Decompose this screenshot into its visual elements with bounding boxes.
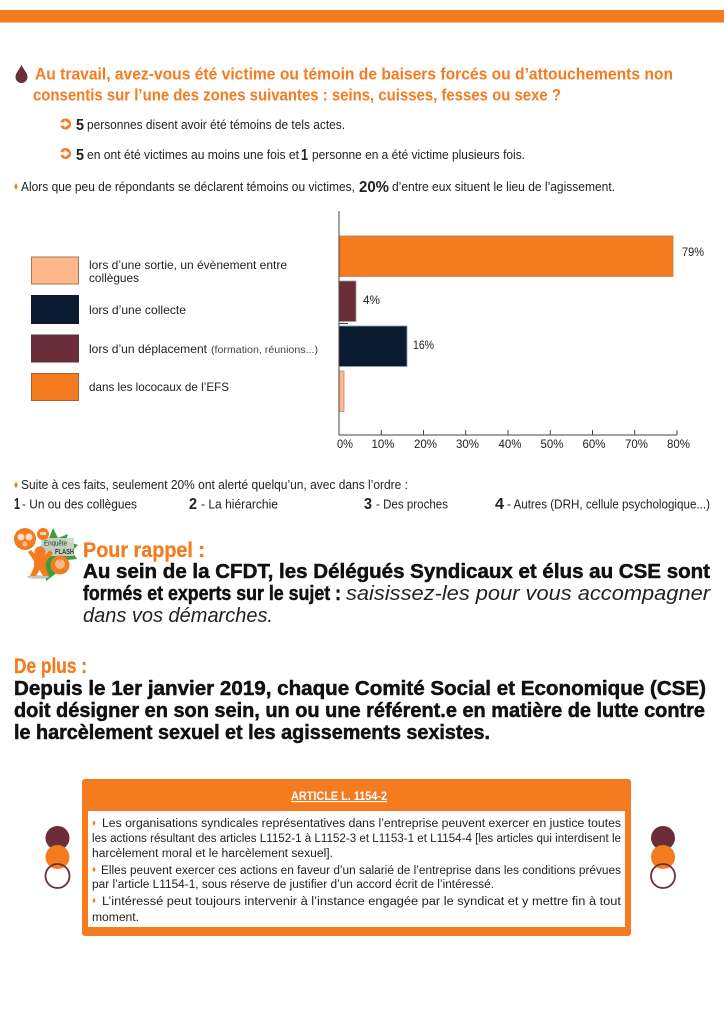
article text: Les organisations syndicales représentatives dans l’entreprise peuvent exercer en justice toutes (102, 818, 621, 830)
bar: collecte 16% (339, 326, 434, 366)
bar: deplacement 4% (339, 281, 380, 322)
bar chart (337, 211, 704, 451)
axis labels: 0% (337, 437, 353, 451)
bar: collecte 16%: 16% (413, 338, 434, 352)
reminder text: Au sein de la CFDT, les Délégués Syndicaux et élus au CSE sont (83, 561, 710, 583)
legend: locaux: dans les lococaux de l’EFS (89, 380, 229, 394)
legend: collecte: lors d’une collecte (89, 303, 186, 317)
rank 3: - Des proches (376, 498, 448, 512)
further block (14, 655, 706, 744)
legend: deplacement: (formation, réunions...) (211, 344, 318, 356)
rank 4: - Autres (DRH, cellule psychologique...) (507, 498, 710, 512)
question text: Au travail, avez-vous été victime ou témoin de baisers forcés ou d’attouchements non (35, 64, 673, 84)
decorative circles right (651, 826, 675, 888)
reminder block (83, 539, 711, 627)
statement: witnesses: 5 (76, 117, 84, 134)
axis labels: 60% (582, 437, 606, 451)
statement: victims: 1 (301, 147, 308, 164)
legend: deplacement (32, 335, 318, 362)
bar: deplacement 4%: 4% (363, 293, 380, 307)
legend: collecte (32, 296, 186, 324)
decorative circles left (46, 826, 70, 888)
rank 2: 2 (189, 496, 197, 513)
bar: sortie (339, 371, 344, 412)
icon: arrow (59, 118, 71, 130)
statement: victims: personne en a été victime plusieurs fois. (312, 148, 525, 162)
icon: blood drop (16, 65, 28, 83)
legend: sortie: collègues (89, 271, 139, 285)
legend: sortie (32, 257, 287, 285)
article text: Elles peuvent exercer ces actions en faveur d’un salarié de l’entreprise dans les conditions prévues (101, 865, 621, 877)
further text: le harcèlement sexuel et les agissements sexistes. (14, 722, 490, 744)
panel: article L. 1154-2 (82, 779, 631, 936)
location statement: Alors que peu de répondants se déclarent témoins ou victimes, (21, 180, 355, 194)
article text: les actions résultant des articles L1152-1 à L1152-3 et L1153-1 et L1154-4 [les articles qui interdisent le (92, 833, 621, 845)
axis labels: 70% (625, 437, 648, 451)
follow-up statement: Suite à ces faits, seulement 20% ont alerté quelqu’un, avec dans l’ordre : (21, 478, 408, 492)
chart legend (32, 257, 318, 400)
article title: ARTICLE L. 1154-2 (291, 791, 387, 803)
axis labels: 30% (456, 437, 479, 451)
article text: moment. (92, 912, 139, 924)
top orange band (0, 10, 724, 22)
reminder text: saisissez-les pour vous accompagner (346, 582, 711, 605)
article text: L’intéressé peut toujours intervenir à l’instance engagée par le syndicat et y mettre fin à tout (102, 896, 622, 908)
reminder text: dans vos démarches. (83, 604, 273, 627)
article text (92, 818, 622, 924)
icon: enquete flash logo: FLASH (55, 547, 74, 556)
rank 1: - Un ou des collègues (22, 498, 137, 512)
axis labels: 10% (372, 437, 395, 451)
statement: victims: en ont été victimes au moins une fois et (87, 148, 300, 162)
axes (339, 211, 677, 435)
reminder text: formés et experts sur le sujet : (83, 583, 341, 605)
rank 3 (364, 496, 448, 513)
statement: victims (59, 147, 525, 164)
further text (14, 678, 706, 744)
axis labels (337, 437, 690, 451)
rank 4: 4 (495, 496, 504, 513)
further text: doit désigner en son sein, un ou une référent.e en matière de lutte contre (14, 700, 705, 722)
further heading: De plus : (14, 655, 87, 678)
bar: locaux 79% (339, 236, 704, 276)
legend: sortie: lors d’une sortie, un évènement entre (89, 258, 287, 272)
statement: victims: 5 (76, 147, 84, 164)
question text: consentis sur l’une des zones suivantes : seins, cuisses, fesses ou sexe ? (33, 86, 561, 104)
rank 2: - La hiérarchie (201, 498, 278, 512)
ranking list (14, 496, 710, 513)
bar: locaux 79%: 79% (682, 245, 704, 259)
axis labels: 40% (498, 437, 522, 451)
article text: par l’article L1154-1, sous réserve de justifier d’un accord écrit de l’intéressé. (92, 879, 494, 891)
question text (33, 64, 673, 104)
legend: deplacement: lors d’un déplacement (89, 342, 208, 356)
axis labels: 80% (667, 437, 690, 451)
rank 2 (189, 496, 278, 513)
icon: enquete flash logo (14, 528, 78, 581)
location statement: 20% (359, 179, 389, 196)
rank 3: 3 (364, 496, 372, 513)
rank 1: 1 (14, 496, 20, 513)
statement: witnesses: personnes disent avoir été témoins de tels actes. (87, 118, 345, 132)
reminder heading: Pour rappel : (83, 539, 205, 562)
legend: locaux (32, 374, 229, 400)
icon: arrow (59, 148, 71, 159)
axis labels: 20% (414, 437, 437, 451)
location statement (14, 179, 615, 196)
icon: enquete flash logo: Enquête (44, 538, 67, 548)
axis labels: 50% (540, 437, 564, 451)
further text: Depuis le 1er janvier 2019, chaque Comité Social et Economique (CSE) (14, 678, 706, 700)
article text: harcèlement moral et le harcèlement sexuel]. (92, 848, 333, 860)
reminder text (83, 561, 711, 627)
location statement: d’entre eux situent le lieu de l’agissement. (392, 180, 615, 194)
question heading (16, 64, 673, 104)
